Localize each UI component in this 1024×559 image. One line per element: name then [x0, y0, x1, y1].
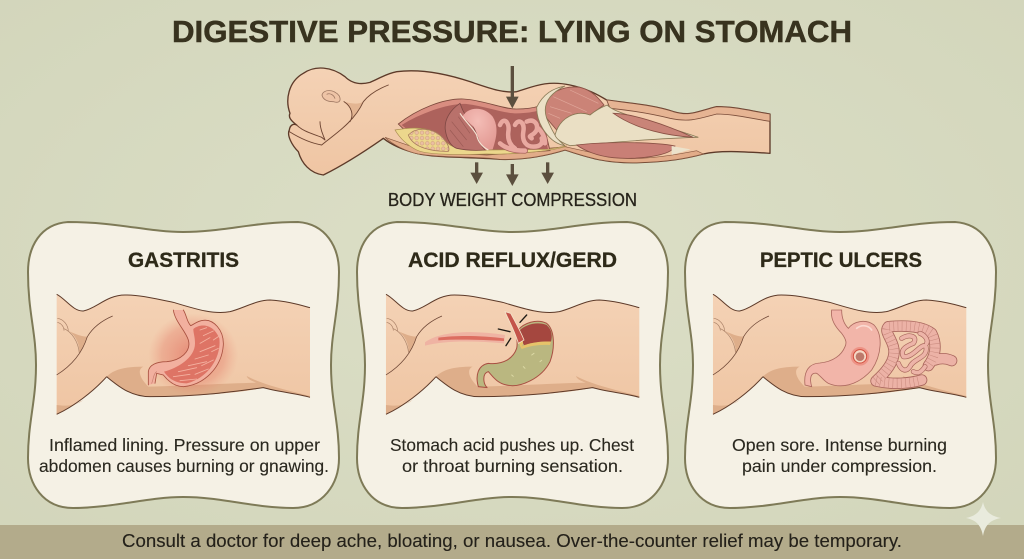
- card background: [28, 222, 339, 508]
- illustration: prone body cross-section: [288, 68, 770, 175]
- dark liver organ: [445, 103, 485, 150]
- description: [39, 435, 329, 476]
- stomach: inflamed lining: [148, 310, 238, 397]
- heading: ACID REFLUX/GERD: [408, 249, 617, 272]
- description: or throat burning sensation.: [402, 456, 623, 476]
- stomach cream edge: [460, 113, 488, 150]
- torso illustration: [57, 294, 310, 414]
- torso illustration: [386, 294, 639, 414]
- stomach with ulcer: [805, 310, 880, 387]
- description: Open sore. Intense burning: [732, 435, 947, 455]
- lower skin band: [385, 137, 703, 163]
- tendon wedge: [555, 105, 698, 146]
- head and arm creases: [289, 85, 388, 145]
- body outline: [288, 68, 770, 175]
- panel: acid reflux: [357, 222, 668, 508]
- intestines: [876, 326, 952, 383]
- icon: sparkle: [966, 502, 1001, 536]
- abdominal cavity: [402, 104, 548, 153]
- arrow: downward pressure: [506, 66, 519, 108]
- footer band: [0, 525, 1024, 559]
- label: body weight compression: BODY WEIGHT COMPRESSION: [388, 190, 637, 210]
- yellow fat layer: [395, 128, 567, 155]
- panel: gastritis: [28, 222, 339, 508]
- description: [390, 435, 634, 476]
- torso illustration: [713, 294, 966, 414]
- kidney-shaped organ: [408, 129, 449, 151]
- muscle striations: [548, 90, 598, 118]
- cavity wall: [398, 99, 550, 155]
- stomach organ: [463, 109, 497, 150]
- lower leg muscle: [577, 143, 675, 158]
- description: Inflamed lining. Pressure on upper: [49, 435, 320, 455]
- liver striations: [450, 117, 470, 147]
- pelvis bone arc: [537, 86, 565, 146]
- description: [732, 435, 947, 476]
- thigh muscle dome: [542, 87, 604, 130]
- description: Stomach acid pushes up. Chest: [390, 435, 634, 455]
- tendon tip: [672, 146, 691, 155]
- arrows: compression: [470, 162, 554, 186]
- description: pain under compression.: [742, 456, 937, 476]
- stomach: acid reflux: [425, 312, 553, 388]
- ear: [322, 90, 340, 102]
- neck shade: [344, 102, 363, 122]
- small intestines: [500, 121, 545, 151]
- card background: [685, 222, 996, 508]
- heading: PEPTIC ULCERS: [760, 249, 922, 272]
- skin layer band on legs: [607, 100, 770, 121]
- title: DIGESTIVE PRESSURE: LYING ON STOMACH: [172, 14, 852, 49]
- upper leg muscle: [613, 113, 693, 137]
- panel: peptic ulcers: [685, 222, 996, 508]
- description: abdomen causes burning or gnawing.: [39, 456, 329, 476]
- footer note: Consult a doctor for deep ache, bloating, or nausea. Over-the-counter relief may be temporary.: [122, 531, 902, 551]
- card background: [357, 222, 668, 508]
- heading: GASTRITIS: [128, 249, 239, 272]
